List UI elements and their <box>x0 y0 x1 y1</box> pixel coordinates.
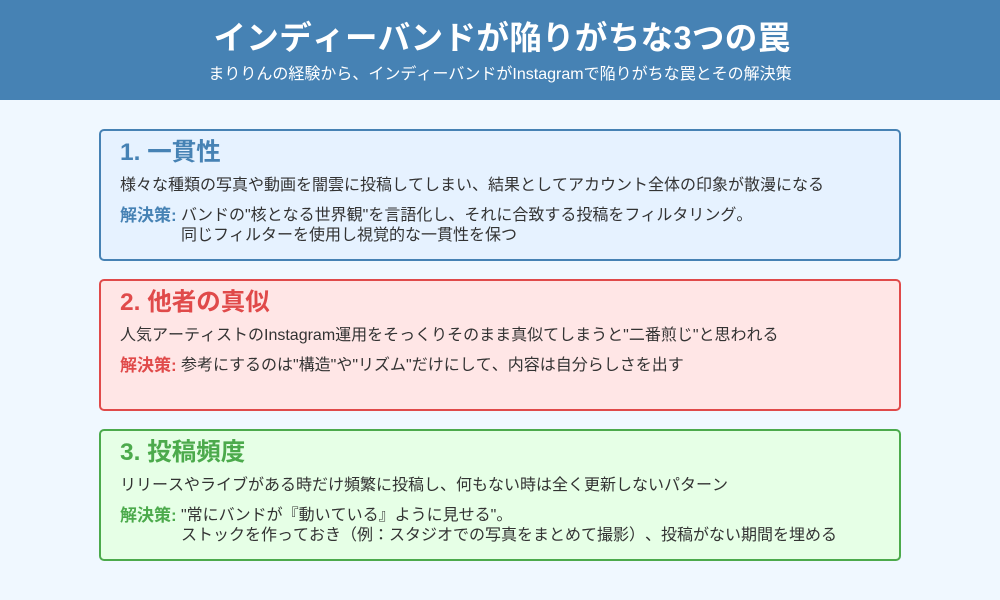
panel: imitation <box>99 279 901 411</box>
solution text: バンドの"核となる世界観"を言語化し、それに合致する投稿をフィルタリング。 <box>181 207 752 224</box>
solution text: "常にバンドが『動いている』ように見せる"。 <box>181 507 512 524</box>
solution label: 解決策: <box>120 206 177 225</box>
heading: consistency: 1. 一貫性 <box>120 139 221 166</box>
panel: posting frequency <box>99 429 901 561</box>
solution text <box>181 206 752 244</box>
title: インディーバンドが陥りがちな3つの罠 <box>214 20 790 56</box>
panel: consistency <box>99 129 901 261</box>
heading: imitation: 2. 他者の真似 <box>120 289 270 316</box>
solution label: 解決策: <box>120 356 177 375</box>
subtitle: まりりんの経験から、インディーバンドがInstagramで陥りがちな罠とその解決策 <box>208 66 792 83</box>
solution label: 解決策: <box>120 506 177 525</box>
problem text: 人気アーティストのInstagram運用をそっくりそのまま真似てしまうと"二番煎じ"と思われる <box>120 327 779 344</box>
problem text: リリースやライブがある時だけ頻繁に投稿し、何もない時は全く更新しないパターン <box>120 477 728 494</box>
solution text <box>181 506 837 544</box>
solution text: 参考にするのは"構造"や"リズム"だけにして、内容は自分らしさを出す <box>181 357 684 374</box>
problem text: 様々な種類の写真や動画を闇雲に投稿してしまい、結果としてアカウント全体の印象が散漫になる <box>120 177 824 194</box>
heading: posting frequency: 3. 投稿頻度 <box>120 439 245 466</box>
solution text: 同じフィルターを使用し視覚的な一貫性を保つ <box>181 227 517 244</box>
header banner <box>0 0 1000 100</box>
solution text: ストックを作っておき（例：スタジオでの写真をまとめて撮影）、投稿がない期間を埋める <box>181 527 837 544</box>
